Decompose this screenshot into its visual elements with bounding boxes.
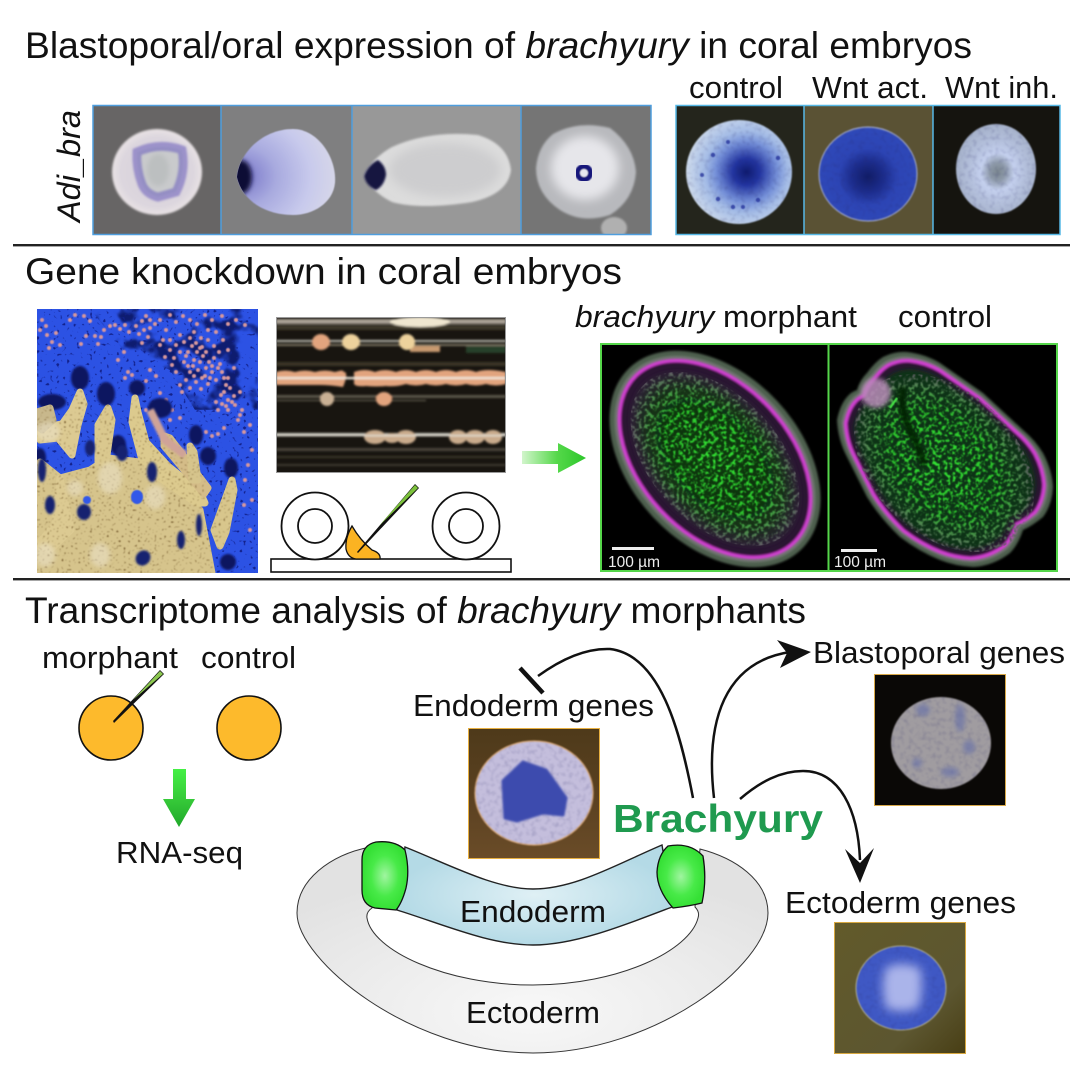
label: brachyury morphant: brachyury morphant	[575, 299, 857, 334]
photo frame lines	[676, 105, 1060, 235]
photo: Wnt inhibited embryo	[933, 105, 1060, 235]
slide	[271, 559, 511, 572]
photo: stage 3	[352, 105, 521, 235]
panel: developmental stage photos	[93, 105, 651, 239]
label: Ectoderm: Ectoderm	[466, 995, 600, 1030]
photo: endoderm gene expression	[468, 728, 600, 858]
photo: embryos in tube	[276, 317, 506, 473]
photo: blastoporal gene expression	[874, 674, 1006, 806]
injection needle	[357, 484, 419, 553]
scale bar: morphant: 100 µm	[608, 554, 660, 571]
label: control: control	[689, 70, 783, 105]
confocal frame lines	[601, 343, 1057, 572]
label: control: control	[898, 299, 992, 334]
embryo being injected	[346, 526, 380, 559]
label: Blastoporal genes: Blastoporal genes	[813, 635, 1065, 670]
heading: gene knockdown: Gene knockdown in coral embryos	[25, 251, 622, 292]
photo frame lines	[93, 105, 651, 235]
confocal: control embryo	[819, 339, 1069, 587]
label: Adi_bra: Adi_bra	[51, 110, 87, 224]
diagram: microinjection setup	[271, 484, 511, 572]
divider 1	[13, 244, 1070, 246]
blastopore ring right	[657, 845, 705, 908]
title: blastoporal expression: Blastoporal/oral expression of brachyury in coral embryos	[25, 25, 972, 66]
icon: control embryo	[217, 696, 281, 760]
icon: morphant embryo with needle	[79, 670, 164, 760]
label: Brachyury: Brachyury	[613, 798, 823, 841]
panel: Wnt treatment photos	[676, 105, 1060, 235]
divider 2	[13, 578, 1070, 580]
label: Ectoderm genes: Ectoderm genes	[785, 885, 1016, 920]
photo: control embryo	[676, 105, 804, 235]
confocal: morphant embryo	[568, 310, 862, 608]
panel: confocal images	[568, 310, 1069, 608]
diagram: embryo cross-section	[297, 842, 768, 1053]
left tube section	[282, 492, 348, 560]
photo: stage 2	[221, 105, 352, 235]
label: Endoderm genes: Endoderm genes	[413, 688, 654, 723]
arrow: green down	[163, 769, 195, 827]
label: Wnt inh.: Wnt inh.	[945, 70, 1058, 105]
label: control: control	[201, 640, 296, 675]
blastopore ring left	[362, 842, 408, 910]
photo: ectoderm gene expression	[834, 922, 966, 1054]
scale bar: control: 100 µm	[834, 554, 886, 571]
ectoderm layer	[297, 847, 768, 1053]
heading: transcriptome analysis: Transcriptome analysis of brachyury morphants	[25, 590, 806, 631]
arrow: inhibition of endoderm genes	[520, 649, 693, 798]
right tube section	[432, 492, 500, 560]
label: Wnt act.: Wnt act.	[812, 70, 928, 105]
arrow: to ectoderm genes	[740, 771, 874, 883]
scale bar: morphant	[608, 547, 660, 571]
arrow: green right	[522, 443, 586, 473]
label: Endoderm: Endoderm	[460, 894, 606, 929]
arrow: to blastoporal genes	[712, 640, 811, 798]
photo: stage 1	[93, 105, 221, 235]
label: morphant: morphant	[42, 640, 178, 675]
photo: spawning coral	[34, 309, 258, 573]
photo: stage 4	[521, 105, 651, 239]
endoderm layer	[397, 845, 672, 945]
label: RNA-seq: RNA-seq	[116, 835, 243, 870]
photo: Wnt activated embryo	[804, 105, 933, 235]
